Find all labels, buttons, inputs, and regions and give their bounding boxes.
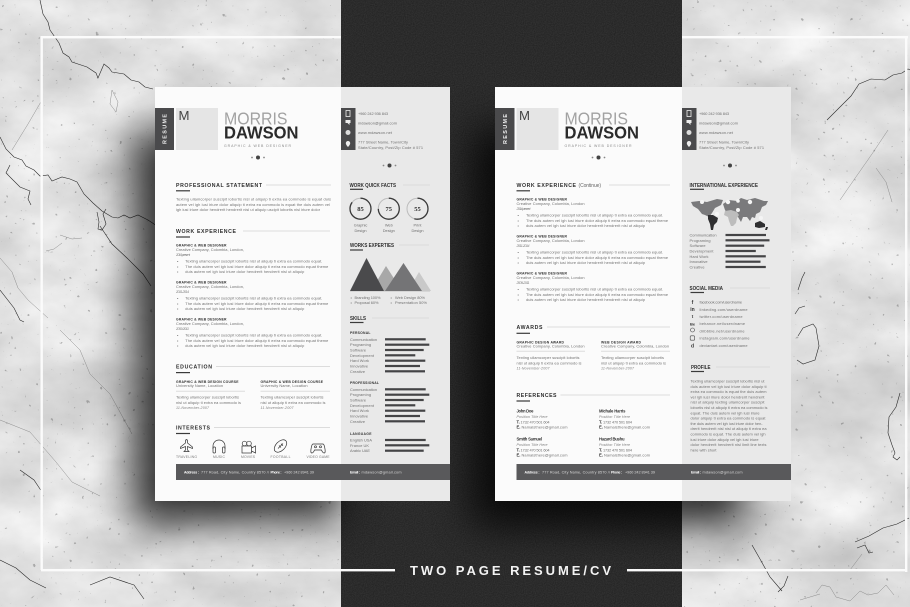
social media: SOCIAL MEDIA: [690, 286, 723, 292]
profile paragraph: extra ea commodo is equat the duis autem: [690, 389, 766, 394]
job 3: •: [518, 297, 520, 302]
gauge labels: Design: [383, 228, 395, 233]
icon: football: [272, 437, 289, 455]
social links: dribbble.net/userdname: [700, 328, 744, 334]
education: nisl ut aliquip ti extra ea commodo is: [176, 400, 241, 405]
world map: [691, 198, 768, 230]
reference michale harris: T.: [599, 420, 602, 424]
interest labels: MUSIC: [213, 455, 226, 459]
page 1 sidebar dots: [383, 164, 396, 168]
job 2: duis autem vel igh iusi iriure dolor hendrerit hendrerit nisl ut aliquip: [185, 306, 304, 311]
page 2 contact block: mdawson@gmail.com: [699, 120, 738, 126]
job 3: duis autem vel igh iusi iriure dolor hendrerit hendrerit nisl ut aliquip: [185, 343, 304, 348]
job 1: •: [177, 264, 179, 269]
reference john doe: 1732 470 501 604: [520, 420, 550, 424]
page 2 sidebar sheet: [682, 87, 791, 501]
page 1 footer bar: +960 242 8941 39: [284, 470, 314, 474]
profile paragraph: equat. The duis autem vel igh iusi iriure: [690, 410, 760, 415]
job 3: 2009-2011: [516, 281, 530, 285]
work quick facts: [350, 183, 430, 233]
job 3: •: [177, 338, 179, 343]
page 1 contact block: mdawson@gmail.com: [358, 120, 397, 126]
job 2: •: [177, 301, 179, 306]
job 3: GRAPHIC & WEB DESIGNER: [516, 272, 568, 276]
work experience: [175, 229, 330, 348]
social links: deviantart.com/userdname: [700, 343, 748, 348]
dark center strip: [341, 0, 682, 607]
awards: Creative Company, Colombia, London: [516, 344, 584, 348]
reference hazard bushu: [599, 436, 650, 458]
social icons: d: [691, 344, 694, 350]
awards: Creative Company, Colombia, London: [601, 344, 669, 348]
job 3: [175, 318, 328, 348]
page 2 footer bar: Address :: [524, 470, 540, 474]
job 2: Texting ullamcorper suscipit lobortis nisl ut aliquip ti extra ea commodo equat.: [526, 250, 663, 254]
reference hazard bushu: Namalsthere@gmail.com: [604, 453, 650, 458]
personal skills: Programing: [350, 342, 371, 347]
awards: AWARDS: [516, 325, 543, 331]
professional statement: igh iusi iriure dolor hendrerit hendrerit nisl ut aliquip uscipit lobortis nisl iriure dolor: [176, 207, 321, 212]
personal skills: Innovative: [350, 364, 368, 368]
personal skills: [350, 331, 429, 374]
experience bars: Communication: [690, 232, 716, 238]
page 1 resume tab: RESUME: [162, 114, 168, 144]
awards: GRAPHIC DESIGN AWARD: [516, 340, 565, 344]
profile paragraph: [690, 378, 768, 452]
page 1 main sheet: [155, 87, 341, 501]
job 3: The duis autem vel igh iusi iriure dolor aliquip ti extra ea commodo equat theme: [526, 292, 668, 297]
professional skills: Communication: [350, 387, 377, 392]
professional skills: Programing: [350, 392, 371, 397]
page 2 name: GRAPHIC & WEB DESIGNER: [564, 144, 632, 148]
chart legend: Proposal 60%: [354, 300, 379, 305]
page 2 main sheet: [495, 87, 682, 501]
personal skills: Creative: [350, 369, 365, 374]
skills: [350, 316, 429, 453]
experience bars: Hard Work: [690, 254, 709, 259]
education: [176, 364, 330, 410]
job 1: Creative Company, Colombia, London: [516, 201, 584, 206]
page 2 contact block: State/Country, Post/Zip Code # 571: [699, 145, 764, 150]
page 1 footer bar: mdawson@gmail.com: [362, 470, 402, 474]
page 2 resume tab: RESUME: [503, 114, 509, 144]
experience bars: Innovative: [690, 259, 708, 264]
social links: twitter.com/userdname: [700, 314, 742, 319]
reference michale harris: Position Title Here: [599, 415, 630, 419]
chart legend: •: [390, 300, 392, 305]
awards: WEB DESIGN AWARD: [601, 340, 642, 344]
page 1 footer bar: Email :: [350, 470, 360, 474]
reference hazard bushu: E.: [599, 453, 603, 458]
profile: PROFILE: [691, 365, 711, 371]
job 3: The duis autem vel igh iusi iriure dolor aliquip ti extra ea commodo equat theme: [185, 338, 328, 343]
job 1: GRAPHIC & WEB DESIGNER: [176, 244, 227, 248]
profile paragraph: vel igh iusi iriure dolor hendrerit hendrerit: [690, 394, 765, 399]
tagline: TWO PAGE RESUME/CV: [410, 563, 611, 578]
job 2: GRAPHIC & WEB DESIGNER: [516, 234, 568, 238]
professional skills: Hard Work: [350, 408, 369, 413]
works experties: WORKS EXPERTIES: [350, 243, 395, 249]
job 1: •: [518, 212, 520, 218]
job 2: [175, 280, 328, 311]
chart legend: [350, 295, 428, 305]
chart legend: Web Design 80%: [395, 295, 426, 300]
page 1 footer bar: Address :: [184, 470, 199, 474]
professional statement: Texting ullamcorper suscipit lobortis nisl ut aliquip ti extra ea commodo is equat duis: [176, 196, 331, 202]
reference michale harris: Michale Harris: [599, 408, 626, 414]
job 2: 2011-2014: [516, 244, 530, 248]
job 1: GRAPHIC & WEB DESIGNER: [516, 198, 568, 202]
page 2 footer bar: +960 242 8941 39: [625, 470, 655, 474]
education: Texting ullamcorper suscipit lobortis: [176, 394, 239, 400]
profile paragraph: drerit hendrerit nisl nisl ut aliquip ti extra ea: [690, 426, 767, 431]
awards: [516, 325, 670, 370]
page 1: [155, 87, 450, 501]
interest labels: FOOTBALL: [270, 455, 291, 459]
interest labels: [176, 455, 330, 459]
education: University Name, Location: [260, 383, 308, 388]
job 3: Creative Company, Colombia, London: [516, 275, 584, 280]
chart legend: •: [350, 295, 352, 300]
profile paragraph: duis autem vel igh iusi iriure dolor aliquip ti: [690, 384, 767, 389]
language skills: [350, 432, 429, 453]
reference john doe: [516, 408, 568, 430]
job 2: The duis autem vel igh iusi iriure dolor aliquip ti extra ea commodo equat theme: [526, 255, 668, 260]
reference john doe: E.: [516, 425, 520, 430]
skills: SKILLS: [350, 316, 367, 322]
gauge labels: Print: [414, 222, 422, 228]
page 2 resume tab: [495, 108, 514, 150]
page 1 resume tab: [155, 108, 174, 150]
page 2 monogram box: M: [519, 108, 530, 123]
reference john doe: T.: [516, 420, 520, 424]
job 1: [516, 198, 668, 228]
page 1 name: [224, 108, 298, 148]
reference smith samuel: 1732 470 501 604: [520, 448, 550, 452]
work experience continued: [516, 183, 670, 302]
job 3: •: [177, 343, 179, 348]
awards: nisl ut aliquip ti extra ea commodo is: [601, 360, 666, 365]
experience bars: Software: [690, 243, 706, 248]
professional skills: Creative: [350, 419, 365, 424]
icon: headphones: [213, 440, 225, 453]
awards: 11-November-2007: [601, 366, 635, 370]
page 2 sidebar dots: [723, 164, 737, 168]
work experience continued: WORK EXPERIENCE: [516, 183, 577, 189]
job 3: 2009-2011: [175, 327, 189, 331]
page 2 name: DAWSON: [564, 122, 639, 142]
page 1 contact block: State/Country, Post/Zip Code # 571: [358, 145, 423, 150]
job 3: •: [177, 332, 179, 338]
page 1 footer bar: Phone :: [270, 470, 282, 474]
social icons: t: [692, 314, 694, 319]
page 2: [495, 87, 791, 501]
reference hazard bushu: Position Title Here: [599, 443, 630, 447]
job 1: 2014-present: [516, 207, 532, 211]
job 1: The duis autem vel igh iusi iriure dolor aliquip ti extra ea commodo equat theme: [185, 264, 328, 269]
page 1 name: GRAPHIC & WEB DESIGNER: [224, 144, 291, 148]
job 2: •: [518, 250, 520, 254]
reference hazard bushu: 1732 470 501 604: [603, 448, 633, 452]
language skills: Arabic UAE: [350, 448, 370, 453]
job 1: Texting ullamcorper suscipit lobortis nisl ut aliquip ti extra ea commodo equat.: [185, 258, 322, 264]
interest labels: MOVIES: [241, 455, 256, 459]
page 2 footer bar: Email :: [691, 470, 701, 474]
professional statement: PROFESSIONAL STATEMENT: [176, 183, 263, 189]
page 1 footer bar: 777 Road, City Name, Country 8570 //: [201, 470, 270, 474]
gauge labels: Web: [385, 222, 393, 228]
job 1: •: [518, 223, 520, 228]
reference smith samuel: E.: [516, 453, 520, 458]
job 2: Creative Company, Colombia, London,: [176, 284, 244, 289]
reference smith samuel: Namalsthere@gmail.com: [522, 453, 568, 458]
professional skills: Development: [350, 403, 375, 408]
page shadows: [134, 128, 744, 526]
chart legend: Branding 100%: [354, 295, 381, 300]
social links: instagram.com/userdname: [700, 336, 750, 341]
job 1: duis autem vel igh iusi iriure dolor hendrerit hendrerit nisl ut aliquip: [526, 223, 645, 228]
page 1 contact block: 777 Street Name, Town/City: [358, 140, 408, 144]
international experience: [690, 183, 770, 270]
social links: behance.net/userdname: [700, 321, 745, 326]
language skills: LANGUAGE: [350, 432, 372, 436]
job 2: GRAPHIC & WEB DESIGNER: [176, 280, 227, 284]
personal skills: Development: [350, 353, 375, 358]
job 2: Texting ullamcorper suscipit lobortis nisl ut aliquip ti extra ea commodo equat.: [185, 296, 322, 300]
reference john doe: John Doe: [516, 408, 534, 414]
profile: [690, 365, 770, 452]
personal skills: Communication: [350, 337, 377, 342]
interests: INTERESTS: [176, 426, 211, 432]
page 1 name: DAWSON: [224, 122, 298, 142]
icon: airplane: [180, 440, 192, 452]
job 1: •: [177, 269, 179, 274]
job 1: duis autem vel igh iusi iriure dolor hendrerit hendrerit nisl ut aliquip: [185, 269, 304, 274]
professional skills: Innovative: [350, 414, 368, 418]
page 2 footer bar: mdawson@gmail.com: [702, 470, 742, 474]
social media: [690, 286, 770, 350]
gauge labels: Design: [354, 228, 367, 233]
interests: [176, 426, 330, 459]
job 3: GRAPHIC & WEB DESIGNER: [176, 318, 227, 322]
page 2 name: MORRIS: [564, 108, 628, 128]
mountain chart: [350, 258, 431, 291]
reference hazard bushu: T.: [599, 448, 602, 452]
reference michale harris: E.: [599, 425, 603, 430]
profile paragraph: the duis autem vel igh iusi iriure dolor hen-: [690, 421, 763, 426]
professional statement: [176, 183, 331, 212]
professional skills: [350, 381, 429, 424]
education: GRAPHIC & WEB DESIGN COURSE: [176, 380, 239, 384]
international experience: INTERNATIONAL EXPERIENCE: [690, 183, 759, 189]
gauge labels: Graphic: [354, 222, 367, 228]
awards: nisl ut aliquip ti extra ea commodo is: [516, 360, 582, 365]
awards: Texting ullamcorper suscipit lobortis: [601, 355, 664, 360]
job 2: [516, 234, 668, 265]
reference john doe: Namalsthere@gmail.com: [522, 425, 568, 430]
job 3: Texting ullamcorper suscipit lobortis nisl ut aliquip ti extra ea commodo equat.: [185, 332, 322, 338]
job 2: •: [518, 260, 520, 265]
page 1 sidebar sheet: [341, 87, 450, 501]
profile paragraph: Texting ullamcorper suscipit lobortis nisl ut: [690, 378, 765, 384]
gauge 75: 75: [386, 206, 393, 213]
gauge labels: Design: [411, 228, 424, 233]
job 1: 2014-present: [175, 253, 191, 257]
experience bars: Development: [690, 248, 714, 254]
page 2 footer bar: [516, 464, 791, 480]
job 1: [175, 244, 328, 274]
job 3: •: [518, 286, 520, 292]
reference michale harris: [599, 408, 650, 430]
chart legend: •: [350, 300, 352, 305]
profile paragraph: iusi iriure dolor aliquip vel igh iusi iriure: [690, 437, 758, 442]
page 2 contact block: www.mdawson.net: [699, 130, 734, 135]
profile paragraph: here with short: [690, 447, 717, 452]
references: REFERENCES: [516, 393, 557, 399]
page 1 header dots: [251, 156, 265, 160]
social icons: Be: [690, 322, 696, 326]
reference hazard bushu: Hazard Bushu: [599, 436, 625, 442]
job 2: •: [518, 255, 520, 260]
personal skills: Software: [350, 348, 366, 352]
reference john doe: Position Title Here: [516, 415, 548, 419]
language skills: English USA: [350, 438, 372, 442]
education: EDUCATION: [176, 364, 212, 370]
social links: [700, 300, 750, 348]
job 1: •: [177, 258, 179, 264]
interest labels: TRAVELING: [176, 455, 197, 459]
page 2 header dots: [592, 156, 605, 160]
education: GRAPHIC & WEB DESIGN COURSE: [260, 380, 324, 384]
job 3: Texting ullamcorper suscipit lobortis nisl ut aliquip ti extra ea commodo equat.: [526, 286, 663, 292]
chart legend: •: [390, 295, 392, 300]
job 2: Creative Company, Colombia, London: [516, 238, 584, 243]
job 2: duis autem vel igh iusi iriure dolor hendrerit hendrerit nisl ut aliquip: [526, 260, 645, 265]
professional skills: Software: [350, 398, 366, 402]
profile paragraph: commodo is equat. The duis autem vel igh: [690, 432, 766, 436]
work quick facts: WORK QUICK FACTS: [350, 183, 397, 189]
personal skills: PERSONAL: [350, 331, 370, 335]
reference smith samuel: T.: [516, 448, 520, 452]
job 3: Creative Company, Colombia, London,: [176, 321, 244, 326]
page 2 contact block: +960 242 936 843: [699, 111, 729, 116]
awards: 11-November-2007: [516, 366, 550, 370]
page 2 contact block: 777 Street Name, Town/City: [699, 140, 749, 144]
profile paragraph: dolor aliquip ti extra ea commodo is equat: [690, 416, 766, 421]
job 2: The duis autem vel igh iusi iriure dolor aliquip ti extra ea commodo equat theme: [185, 301, 328, 306]
page 1 name: MORRIS: [224, 108, 288, 128]
page 1 monogram box: M: [178, 108, 190, 123]
social icons: [690, 300, 696, 350]
education: 11-November-2007: [176, 406, 210, 410]
job 3: duis autem vel igh iusi iriure dolor hendrerit hendrerit nisl ut aliquip: [526, 297, 645, 302]
job 3: •: [518, 292, 520, 297]
gauge labels: [354, 222, 424, 233]
education: University Name, Location: [176, 383, 223, 388]
education: Texting ullamcorper suscipit lobortis: [260, 394, 324, 400]
page 1 footer bar: [176, 464, 450, 480]
page 1 contact block: www.mdawson.net: [358, 130, 393, 135]
job 2: 2011-2014: [175, 290, 189, 294]
job 1: The duis autem vel igh iusi iriure dolor aliquip ti extra ea commodo equat theme: [526, 218, 668, 223]
page 2 footer bar: Phone :: [611, 470, 622, 474]
works experties: [350, 243, 431, 305]
job 1: •: [518, 218, 520, 223]
reference michale harris: Namalsthere@gmail.com: [604, 425, 650, 430]
reference smith samuel: Smith Samuel: [516, 436, 542, 442]
chart legend: Presentation 50%: [395, 300, 428, 305]
icon: movie camera: [242, 441, 256, 453]
work experience: WORK EXPERIENCE: [176, 229, 237, 235]
page 2 contact block: [682, 108, 764, 150]
job 1: Creative Company, Colombia, London,: [176, 247, 244, 252]
reference smith samuel: Position Title Here: [516, 443, 548, 447]
interest labels: VIDEO GAME: [306, 455, 330, 459]
gauge 85: 85: [357, 206, 364, 213]
professional statement: autem vel igh iusi iriure dolor aliquip ti extra ea commodo is equat the duis autem vel: [176, 202, 330, 207]
page 2 name: [564, 108, 639, 148]
job 3: [516, 272, 668, 302]
social icons: f: [692, 300, 694, 306]
social links: linkeding.com/userdname: [700, 307, 748, 312]
education: 11-November-2007: [260, 406, 294, 410]
icon: gamepad: [311, 444, 325, 453]
education: nisl ut aliquip ti extra ea commodo is: [260, 400, 326, 405]
reference smith samuel: [516, 436, 568, 458]
profile paragraph: nisl ut aliquip texting ullamcorper suscipit: [690, 400, 765, 405]
profile paragraph: dolor hendrerit hendrerit nisl limit line texts: [690, 442, 767, 447]
experience bars: [690, 232, 770, 270]
gauge 55: 55: [414, 206, 422, 213]
page 1 contact block: [341, 108, 423, 150]
language skills: France UK: [350, 443, 369, 448]
page 2 monogram box: [516, 108, 558, 150]
page 1 contact block: +960 242 936 843: [358, 111, 388, 116]
experience bars: Programing: [690, 238, 710, 243]
professional skills: PROFESSIONAL: [350, 381, 379, 385]
job 2: •: [177, 306, 179, 311]
social icons: in: [690, 307, 695, 313]
references: [516, 393, 670, 458]
page 1 monogram box: [176, 108, 218, 150]
job 2: •: [177, 296, 179, 300]
page 2 footer bar: 777 Road, City Name, Country 8570 //: [542, 470, 611, 474]
experience bars: Creative: [690, 264, 704, 270]
social links: facebook.com/userdname: [700, 300, 742, 304]
job 1: Texting ullamcorper suscipit lobortis nisl ut aliquip ti extra ea commodo equat.: [526, 212, 663, 218]
reference michale harris: 1732 470 501 604: [603, 420, 633, 424]
work experience continued: (Continue): [578, 183, 601, 189]
profile paragraph: lobortis nisl ut aliquip ti extra ea commodo is: [690, 405, 768, 410]
personal skills: Hard Work: [350, 358, 369, 363]
awards: Texting ullamcorper suscipit lobortis: [516, 355, 580, 360]
